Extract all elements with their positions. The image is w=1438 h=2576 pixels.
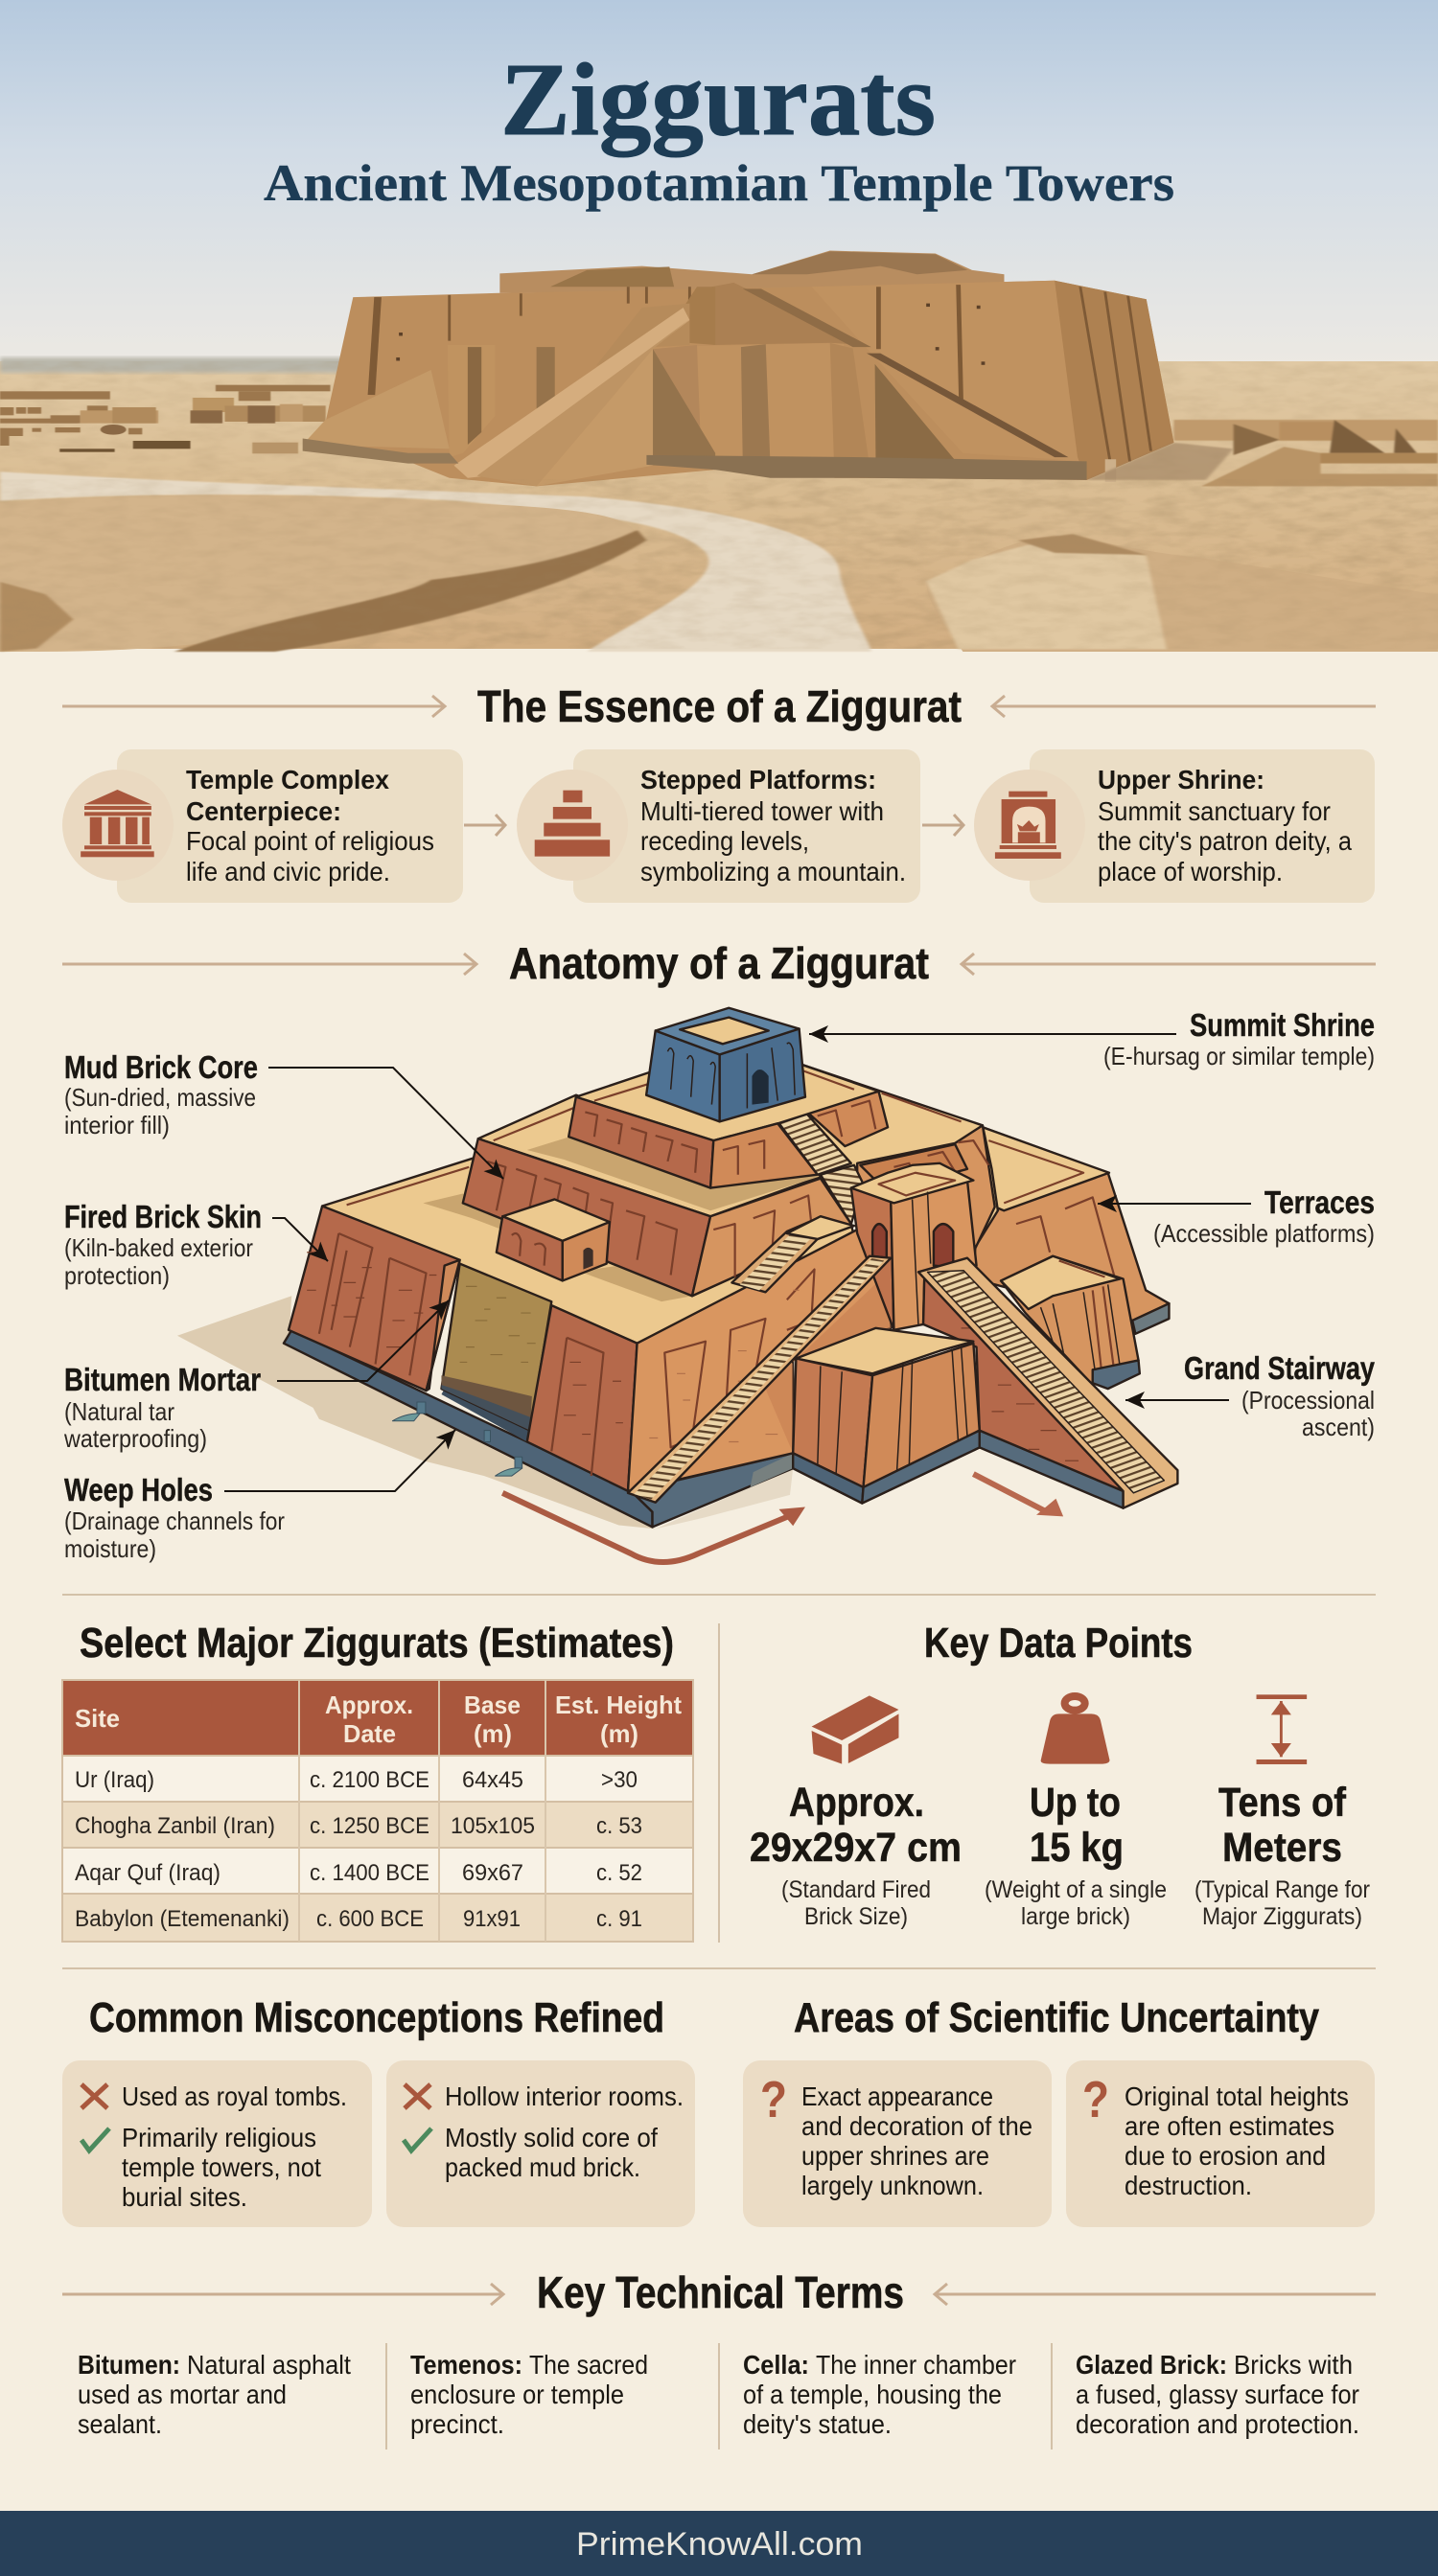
- back right terrace: [973, 1127, 1169, 1321]
- table header: Base: [464, 1690, 521, 1719]
- heading arrows: [62, 2284, 1376, 2305]
- card: royal tombs: [62, 2060, 372, 2227]
- term: temenos: Temenos:: [410, 2350, 522, 2380]
- stat: height: Meters: [1222, 1825, 1342, 1871]
- section: anatomy of a ziggurat: [62, 938, 1376, 1563]
- term: bitumen: Natural asphalt: [187, 2350, 351, 2380]
- card text: life and civic pride.: [186, 857, 390, 886]
- heading: Areas of Scientific Uncertainty: [794, 1994, 1319, 2041]
- card: royal tombs: Primarily religious: [122, 2123, 316, 2152]
- second tier faces: [463, 1138, 710, 1296]
- hero photo: Ziggurat of Ur in desert: [0, 0, 1438, 652]
- stat: brick weight: large brick): [1021, 1903, 1130, 1930]
- stat: brick weight: [985, 1696, 1167, 1930]
- ziggurat cutaway diagram: [177, 1008, 1177, 1562]
- card text: Multi-tiered tower with: [640, 796, 884, 826]
- stat: brick size: Brick Size): [804, 1903, 908, 1930]
- term: cella: The inner chamber: [816, 2350, 1016, 2380]
- label: bitumen mortar: (Natural tar: [64, 1397, 174, 1426]
- label: grand stairway: (Processional: [1241, 1386, 1375, 1414]
- table rows: 105x105: [451, 1813, 535, 1839]
- arrow: [464, 815, 505, 836]
- stat: brick weight: (Weight of a single: [985, 1876, 1167, 1903]
- label: weep holes: moisture): [64, 1534, 156, 1563]
- card: hollow interior: Mostly solid core of: [445, 2123, 658, 2152]
- key data points section: [750, 1620, 1370, 1930]
- term: cella: of a temple, housing the: [743, 2380, 1002, 2409]
- label: bitumen mortar: waterproofing): [63, 1424, 207, 1453]
- label: summit shrine: [809, 1007, 1375, 1070]
- back upper terrace: [802, 1065, 998, 1260]
- card: heights are estimates: destruction.: [1125, 2171, 1252, 2200]
- footer bar: PrimeKnowAll.com: [576, 2526, 863, 2563]
- grand stairway red wall: [923, 1274, 1124, 1491]
- card: hollow interior: Hollow interior rooms.: [445, 2082, 684, 2111]
- card text: the city's patron deity, a: [1098, 826, 1352, 856]
- icon: cross: [81, 2084, 107, 2108]
- label: mud brick core: [64, 1049, 503, 1179]
- icon: shrine: [995, 792, 1061, 859]
- stat: brick size: (Standard Fired: [781, 1876, 931, 1903]
- table rows: 64x45: [462, 1767, 523, 1793]
- ruins right: [1173, 420, 1438, 486]
- icon: weight: [1041, 1696, 1109, 1764]
- front block: [796, 1328, 973, 1373]
- label: grand stairway: [1125, 1350, 1376, 1441]
- stat: height: Major Ziggurats): [1202, 1903, 1362, 1930]
- second tier deck: [478, 1095, 821, 1216]
- heading arrows: [62, 696, 1376, 717]
- table header: Date: [343, 1719, 396, 1748]
- table rows: 91x91: [463, 1906, 521, 1932]
- label: grand stairway: Grand Stairway: [1184, 1350, 1376, 1386]
- table rows: Ur (Iraq): [75, 1767, 154, 1793]
- card: upper shrines unknown: largely unknown.: [801, 2171, 984, 2200]
- card: upper shrine: [974, 749, 1375, 903]
- icon: question mark: ?: [1082, 2071, 1109, 2128]
- label: grand stairway: ascent): [1302, 1413, 1375, 1441]
- table rows: [75, 1767, 642, 1932]
- third tier: [576, 1065, 879, 1140]
- label: summit shrine: Summit Shrine: [1190, 1007, 1375, 1043]
- table rows: c. 53: [596, 1813, 642, 1839]
- red flow arrows: [502, 1474, 1063, 1562]
- label: fired brick skin: [64, 1199, 328, 1290]
- card text: [1098, 765, 1352, 886]
- card: heights are estimates: are often estimates: [1125, 2111, 1334, 2141]
- title: [264, 43, 1174, 212]
- icon: temple: [81, 790, 154, 857]
- ziggurat: [303, 251, 1234, 486]
- label: bitumen mortar: [63, 1300, 449, 1453]
- card: royal tombs: temple towers, not: [122, 2152, 321, 2182]
- stat: brick size: Approx.: [789, 1780, 924, 1826]
- card text: Stepped Platforms:: [640, 765, 876, 794]
- mounds: [0, 495, 638, 652]
- term: bitumen: sealant.: [78, 2409, 162, 2439]
- icon: stepped tower: [535, 791, 610, 857]
- heading: Anatomy of a Ziggurat: [509, 938, 929, 988]
- label: bitumen mortar: Bitumen Mortar: [64, 1362, 261, 1397]
- table rows: Aqar Quf (Iraq): [75, 1860, 220, 1886]
- icon: question mark: ?: [760, 2071, 787, 2128]
- card text: receding levels,: [640, 826, 809, 856]
- term: glazed brick: [1076, 2350, 1359, 2439]
- card: royal tombs: Used as royal tombs.: [122, 2082, 347, 2111]
- road: [0, 472, 871, 652]
- section: the essence of a ziggurat: [62, 681, 1376, 903]
- icon: cross: [405, 2084, 430, 2108]
- icon: check: [404, 2128, 431, 2150]
- arrow: [922, 815, 963, 836]
- section: areas of scientific uncertainty: [743, 1994, 1375, 2227]
- base slab: [284, 1330, 653, 1527]
- label: fired brick skin: (Kiln-baked exterior: [64, 1233, 253, 1262]
- term: temenos: [410, 2350, 648, 2439]
- heading: The Essence of a Ziggurat: [477, 681, 962, 731]
- table rows: 69x67: [462, 1860, 523, 1886]
- ground shadow: [177, 1296, 656, 1529]
- upper left stair: [731, 1218, 851, 1292]
- card: hollow interior: packed mud brick.: [445, 2152, 640, 2182]
- weep holes: [392, 1402, 522, 1476]
- label: mud brick core: (Sun-dried, massive: [64, 1083, 256, 1112]
- card: stepped platforms: [517, 749, 920, 903]
- table rows: c. 1250 BCE: [310, 1813, 429, 1839]
- card: hollow interior: [386, 2060, 695, 2227]
- mud brick core cutaway: [441, 1264, 551, 1431]
- card text: Centerpiece:: [186, 796, 341, 826]
- term: bitumen: [78, 2350, 351, 2439]
- card: upper shrines unknown: and decoration of the: [801, 2111, 1032, 2141]
- table rows: >30: [601, 1767, 638, 1793]
- table header: Approx.: [325, 1690, 413, 1719]
- label: weep holes: Weep Holes: [64, 1472, 213, 1507]
- term: cella: [743, 2350, 1016, 2439]
- stat: brick size: 29x29x7 cm: [750, 1825, 962, 1871]
- heading: Key Data Points: [924, 1620, 1193, 1667]
- label: mud brick core: interior fill): [64, 1111, 170, 1139]
- table rows: c. 91: [596, 1906, 642, 1932]
- section: common misconceptions: [62, 1994, 695, 2227]
- stat: height: [1194, 1694, 1370, 1930]
- heading arrows: [62, 954, 1376, 975]
- table section: select major ziggurats: [62, 1620, 693, 1942]
- table rows: Chogha Zanbil (Iran): [75, 1813, 275, 1839]
- front right wall: [628, 1230, 891, 1491]
- grand stairway left flight: [628, 1256, 891, 1503]
- label: weep holes: (Drainage channels for: [64, 1506, 285, 1535]
- label: weep holes: [64, 1430, 455, 1563]
- right part of left wall: [527, 1305, 638, 1491]
- section: key technical terms: [62, 2267, 1376, 2450]
- card: upper shrines unknown: upper shrines are: [801, 2141, 989, 2171]
- term: temenos: The sacred: [529, 2350, 648, 2380]
- table header: Site: [75, 1704, 120, 1733]
- label: terraces: (Accessible platforms): [1153, 1219, 1375, 1248]
- small block on deck: [502, 1199, 610, 1241]
- card: royal tombs: burial sites.: [122, 2182, 247, 2212]
- term: bitumen: Bitumen:: [78, 2350, 180, 2380]
- icon: height range: [1257, 1694, 1307, 1764]
- card text: Focal point of religious: [186, 826, 434, 856]
- stat: brick weight: 15 kg: [1030, 1825, 1124, 1871]
- card text: place of worship.: [1098, 857, 1283, 886]
- stat: height: Tens of: [1218, 1780, 1347, 1826]
- term: glazed brick: a fused, glassy surface for: [1076, 2380, 1359, 2409]
- label: terraces: Terraces: [1264, 1184, 1375, 1220]
- term: cella: deity's statue.: [743, 2409, 892, 2439]
- right tower: [1001, 1256, 1139, 1385]
- card text: Summit sanctuary for: [1098, 796, 1331, 826]
- grand stairway right flight: [918, 1258, 1177, 1508]
- card: heights are estimates: Original total heights: [1125, 2082, 1349, 2111]
- dark base band: [303, 439, 458, 464]
- ruins left: [0, 385, 331, 453]
- card: heights are estimates: [1066, 2060, 1375, 2227]
- label: summit shrine: (E-hursag or similar temple): [1103, 1042, 1375, 1070]
- gate tower: [851, 1188, 893, 1330]
- card text: Temple Complex: [186, 765, 389, 794]
- shaded wedge: [766, 1268, 893, 1453]
- left wall: [289, 1207, 460, 1391]
- table rows: Babylon (Etemenanki): [75, 1906, 290, 1932]
- table rows: c. 2100 BCE: [310, 1767, 429, 1793]
- card: upper shrines unknown: [743, 2060, 1052, 2227]
- table header: Est. Height: [555, 1690, 682, 1719]
- table rows: c. 52: [596, 1860, 642, 1886]
- label: mud brick core: Mud Brick Core: [64, 1049, 258, 1085]
- term: glazed brick: Glazed Brick:: [1076, 2350, 1227, 2380]
- card: heights are estimates: due to erosion and: [1125, 2141, 1326, 2171]
- heading: Common Misconceptions Refined: [89, 1994, 664, 2041]
- stat: height: (Typical Range for: [1194, 1876, 1370, 1903]
- card: temple complex centerpiece: [62, 749, 463, 903]
- term: bitumen: used as mortar and: [78, 2380, 287, 2409]
- table rows: c. 600 BCE: [316, 1906, 424, 1932]
- title: Ziggurats: [500, 43, 936, 157]
- card text: Upper Shrine:: [1098, 765, 1264, 794]
- table header: (m): [474, 1719, 512, 1748]
- subtitle: Ancient Mesopotamian Temple Towers: [264, 154, 1174, 212]
- summit shrine: [646, 1030, 720, 1121]
- upper stair: [805, 1092, 888, 1146]
- term: cella: Cella:: [743, 2350, 809, 2380]
- stat: brick size: [750, 1695, 962, 1930]
- table header: (m): [600, 1719, 638, 1748]
- stat: brick weight: Up to: [1030, 1780, 1121, 1826]
- heading: Key Technical Terms: [537, 2267, 904, 2317]
- label: fired brick skin: Fired Brick Skin: [64, 1199, 262, 1234]
- card text: [186, 765, 434, 886]
- term: temenos: precinct.: [410, 2409, 504, 2439]
- data table: [62, 1680, 693, 1942]
- card text: [640, 765, 906, 886]
- icon: brick: [812, 1695, 898, 1764]
- table header: [75, 1690, 682, 1748]
- label: fired brick skin: protection): [64, 1261, 170, 1290]
- label: terraces: [1098, 1184, 1375, 1248]
- table rows: c. 1400 BCE: [310, 1860, 429, 1886]
- term: temenos: enclosure or temple: [410, 2380, 624, 2409]
- stairs left: [454, 308, 689, 478]
- table heading: Select Major Ziggurats (Estimates): [80, 1620, 674, 1667]
- icon: check: [81, 2128, 109, 2150]
- term: glazed brick: Bricks with: [1234, 2350, 1353, 2380]
- term: glazed brick: decoration and protection.: [1076, 2409, 1359, 2439]
- main deck: [322, 1158, 854, 1344]
- footer bar: [0, 2511, 1438, 2576]
- card text: symbolizing a mountain.: [640, 857, 906, 886]
- stair right and shadow: [875, 364, 965, 473]
- card: upper shrines unknown: Exact appearance: [801, 2082, 993, 2111]
